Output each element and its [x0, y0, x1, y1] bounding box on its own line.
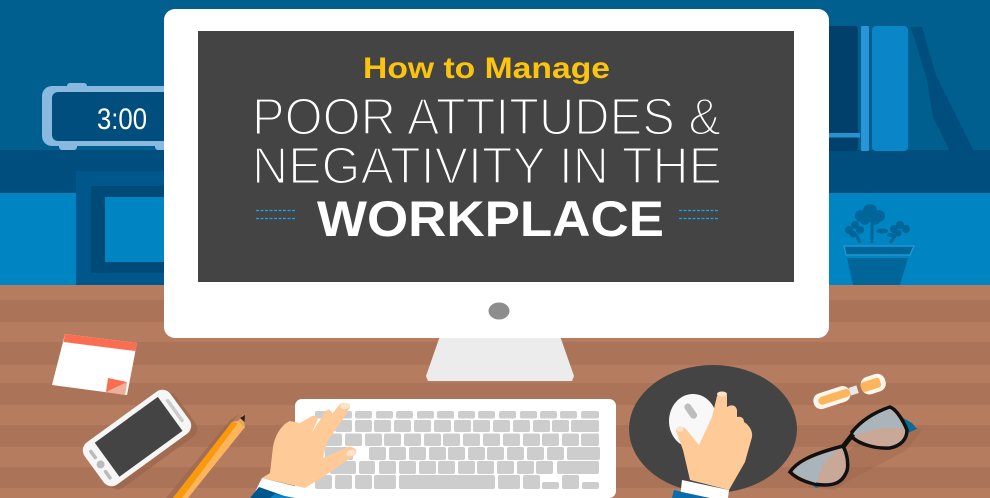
books on shelf [825, 26, 974, 151]
monitor [164, 9, 829, 338]
icon: potted plant [844, 204, 914, 285]
title [252, 52, 722, 247]
icon: alarm clock [42, 83, 182, 150]
icon: pencil [166, 414, 245, 498]
wall background [0, 0, 990, 285]
monitor stand [426, 336, 574, 381]
icon: smartphone [79, 384, 201, 495]
keyboard keys [315, 411, 600, 489]
title: WORKPLACE [317, 191, 664, 247]
picture frame [76, 171, 176, 285]
icon: glasses [790, 407, 922, 490]
sticky note [52, 334, 137, 395]
monitor screen [198, 31, 794, 282]
keyboard [295, 399, 616, 498]
decorative dashes beside title [256, 210, 718, 218]
mouse pad [629, 365, 797, 493]
title: POOR ATTITUDES & [252, 88, 721, 146]
right hand [672, 392, 752, 498]
title: NEGATIVITY IN THE [252, 136, 722, 194]
icon: alarm clock: 3:00 [97, 103, 147, 136]
mouse [669, 394, 717, 448]
monitor button [488, 302, 510, 320]
wooden desk [0, 285, 990, 498]
title: How to Manage [363, 52, 610, 85]
icon: USB drive [811, 372, 888, 412]
left hand [250, 402, 357, 498]
